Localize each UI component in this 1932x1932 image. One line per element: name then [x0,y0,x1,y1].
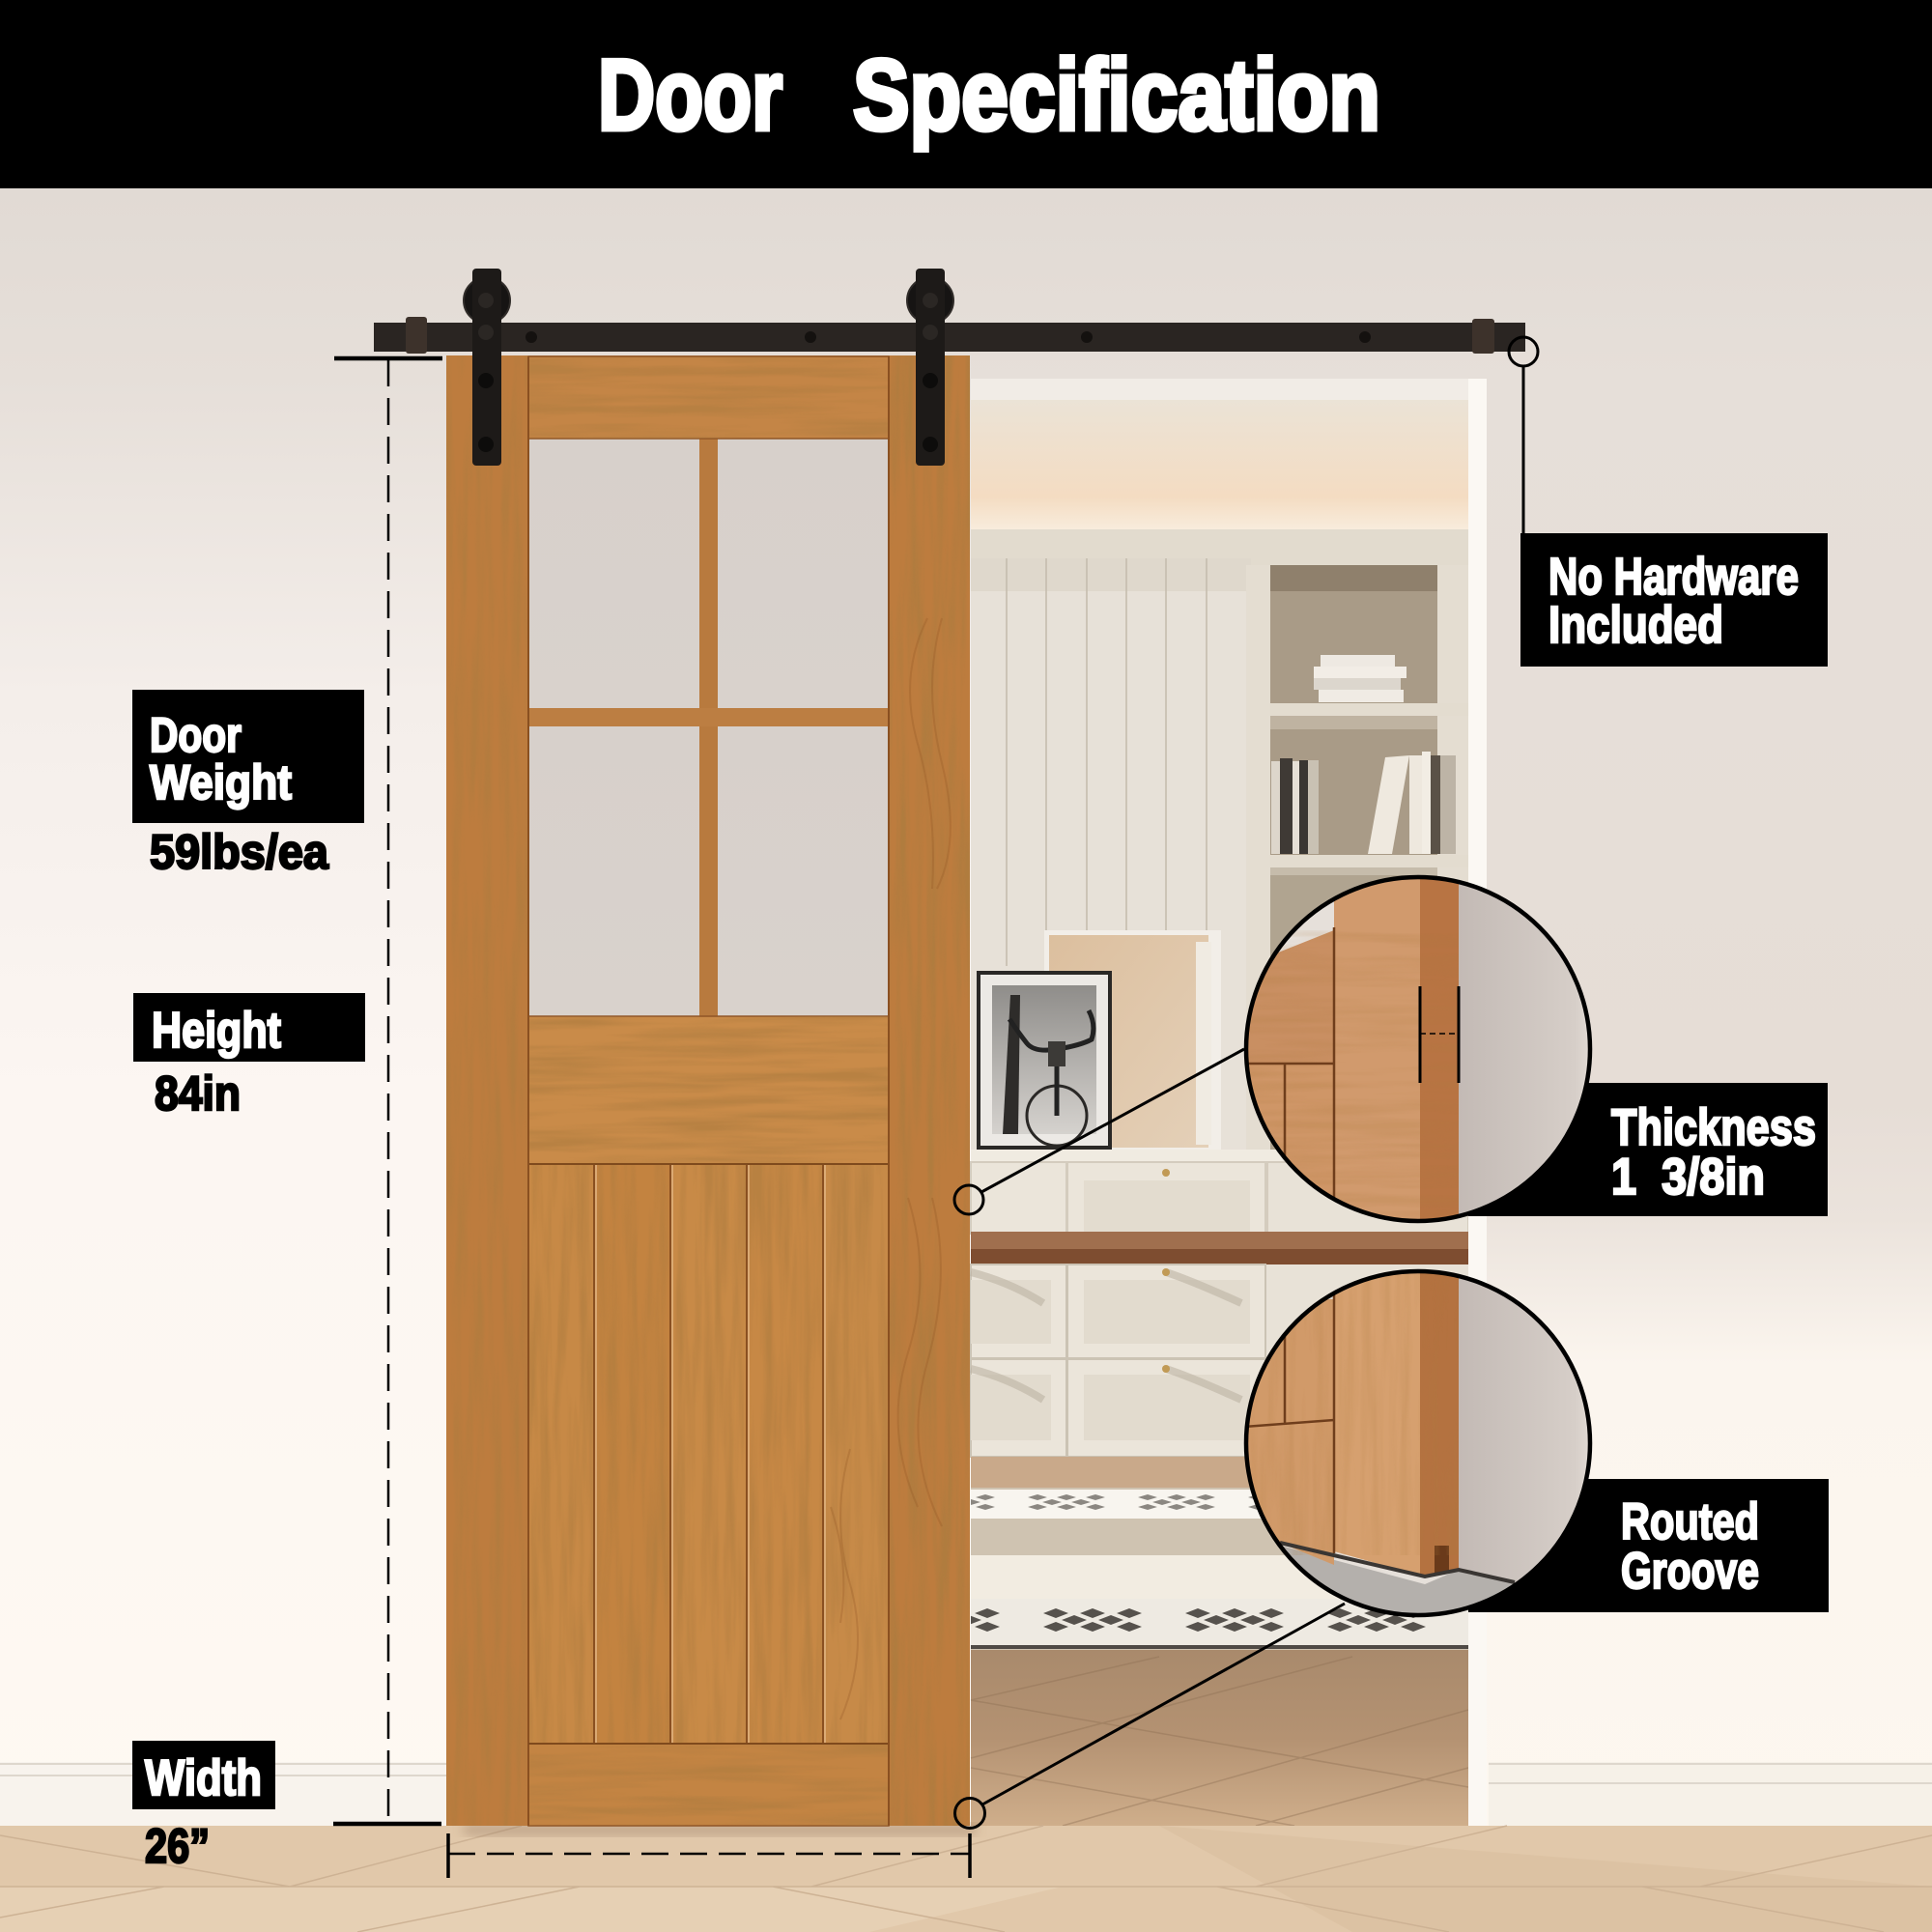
callout: no hardware included: No Hardware [1548,548,1799,606]
console top and upper drawers [971,1150,1468,1235]
barn door [446,355,970,1826]
sliding track rail [374,317,1525,354]
lock rail [528,1016,889,1164]
width dimension line [448,1833,970,1878]
window muntins [528,439,889,1015]
callout: routed groove: Groove [1621,1543,1759,1600]
height dimension line [333,358,442,1826]
back floor and rug [971,1457,1468,1826]
glass panes [528,439,889,1016]
magnifier: routed groove detail [1244,1265,1604,1633]
left strap hanger [464,269,510,466]
right strap hanger [907,269,953,466]
door body [446,355,970,1826]
five vertical planks [528,1165,888,1744]
callout: routed groove: Routed [1621,1493,1759,1550]
book stack [1314,655,1406,702]
title bar: Specification [853,40,1380,152]
callout: door weight [132,690,364,879]
leader lines and markers [954,1049,1345,1828]
wood grain [446,355,970,1826]
beige art print [1044,930,1221,1150]
callout: width: Width [145,1750,262,1806]
bookcase [1246,565,1468,1164]
wooden floor [0,1826,1932,1932]
callout: thickness: Thickness [1611,1099,1816,1156]
top rail [528,356,889,439]
framed bicycle photograph [977,971,1112,1150]
baseboards [0,1762,1932,1827]
callout: width [132,1741,275,1873]
callout: height [133,993,365,1121]
bottom rail [528,1744,889,1826]
room seen through doorway [971,400,1468,1826]
callout: door weight: Door [150,708,242,762]
door jamb and header trim [971,379,1487,1828]
wooden shelf [971,1232,1468,1264]
callout: no hardware included [1509,337,1828,667]
callout: door weight: 59lbs/ea [150,825,329,879]
panel grooves [528,356,889,1826]
ceiling [971,400,1468,529]
magnifier: door thickness detail [1244,869,1604,1228]
callout: door weight: Weight [150,755,292,810]
title bar: Door [598,40,782,152]
upright books [1271,752,1456,854]
callout: width: 26” [145,1819,210,1873]
callout: no hardware included: Included [1548,596,1723,654]
callout: routed groove [1468,1479,1829,1612]
callout: thickness: 1 3/8in [1611,1149,1765,1206]
panelled back wall [971,558,1251,1157]
cornice [971,529,1468,566]
callout: height: Height [152,1003,281,1059]
callout: height: 84in [155,1066,241,1121]
title bar [0,0,1932,188]
callout: thickness [1468,1083,1828,1216]
lower drawers [971,1264,1468,1457]
